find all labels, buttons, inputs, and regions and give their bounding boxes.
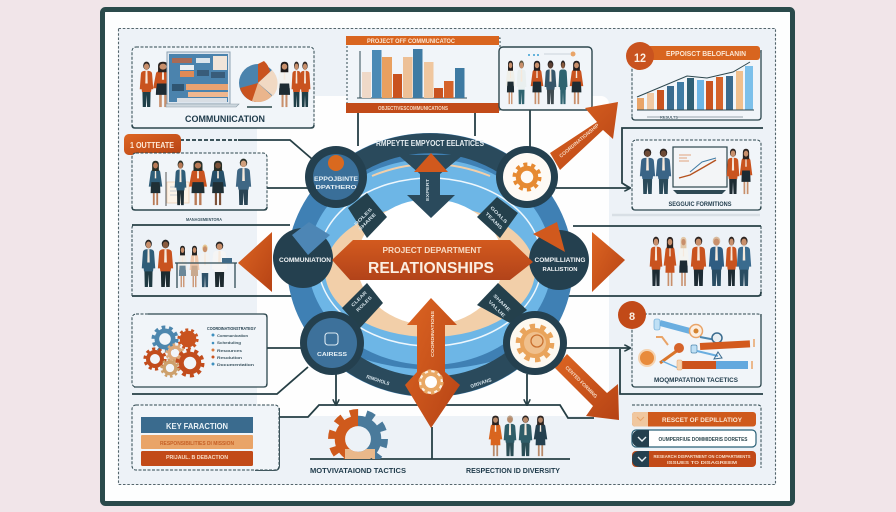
bar: lower row bbox=[141, 451, 253, 466]
panel: top team bbox=[499, 47, 592, 110]
icon: motivation gear bbox=[332, 413, 384, 465]
node: left communication: COMMUNIATION bbox=[279, 258, 331, 264]
bar chart: rising bbox=[637, 62, 754, 110]
bar chart bbox=[357, 49, 467, 98]
bar: key faraction bbox=[141, 417, 253, 433]
chart footer: OBJECTIVESCOMMUNICATIONS bbox=[378, 106, 449, 112]
arc: bottom band: GRIVANS bbox=[470, 377, 493, 390]
chart header: PROJECT OFF COMMUNICATOC bbox=[367, 39, 456, 45]
node: top-right bbox=[496, 146, 558, 208]
arc: bottom band bbox=[340, 354, 520, 390]
arrow: north-east bbox=[550, 102, 618, 170]
arc: top band bbox=[340, 139, 520, 176]
arrow: bottom centre: COORDINATIONS bbox=[430, 311, 435, 357]
row: resolve bbox=[632, 451, 756, 467]
list: gear items: Scheduling bbox=[217, 341, 242, 345]
outer frame bbox=[102, 10, 792, 504]
arrow: top centre: EXPERT bbox=[425, 179, 430, 201]
badge: 8 bbox=[618, 301, 646, 329]
icon: pie chart bbox=[239, 61, 278, 107]
arc: bottom band: RIMOHOLS bbox=[365, 374, 391, 387]
panel: meeting team bbox=[132, 153, 267, 210]
node: right compiling: RALLISTION bbox=[542, 267, 578, 273]
icon: audience bbox=[277, 62, 310, 107]
dashed inner border bbox=[118, 28, 776, 484]
panel: gears list bbox=[132, 314, 267, 387]
tab text: SHARE bbox=[492, 293, 511, 312]
arrow: right bbox=[592, 232, 625, 292]
panel: respect rows bbox=[632, 405, 761, 468]
arc: top band: RMPEYTE EMPYOCT EELATICES bbox=[376, 139, 485, 148]
icon: seven people bbox=[650, 237, 751, 286]
label: motivation tactics bottom: MOTVIVATAIOND TACTICS bbox=[310, 466, 406, 475]
tab text: CLEAR bbox=[350, 289, 369, 308]
arrow: top centre bbox=[398, 153, 463, 218]
icon: diversity group bbox=[489, 416, 547, 456]
panel: communication bbox=[132, 47, 314, 128]
arrow: north-east: COORDINATIONSHIP bbox=[558, 122, 601, 160]
tab text: SHARE bbox=[357, 212, 377, 232]
tab text: TEAMS bbox=[484, 211, 503, 230]
infographic bbox=[100, 7, 795, 506]
panel: bar chart top centre bbox=[346, 36, 500, 113]
panel: right team bbox=[650, 226, 761, 296]
chart footer bbox=[346, 103, 499, 113]
row: communicate: OUMPERFIUE DOMMIDERIS DORETES bbox=[658, 437, 748, 443]
arrow: south-east bbox=[555, 354, 619, 420]
label: communication: COMMUNIICATION bbox=[185, 114, 265, 124]
white centre area bbox=[257, 96, 609, 416]
ring diagram bbox=[273, 133, 589, 428]
list: gear items: COORDINATIONSTRATEGY bbox=[207, 326, 256, 331]
badge: 1 outteate bbox=[124, 134, 181, 155]
row: resolve: ISSUES TO DISAGREEM bbox=[667, 460, 737, 465]
icon: laptop dashboard bbox=[166, 52, 239, 107]
arrow: south-east: CENTED FORMING bbox=[564, 365, 598, 400]
icon: two men bbox=[640, 149, 671, 194]
bar: middle row: RESPONSIBILITIES DI MISSION bbox=[160, 441, 234, 447]
list: gear items: Documentation bbox=[217, 363, 255, 367]
tab text: ROLES bbox=[353, 207, 373, 227]
icon: monitor bbox=[673, 147, 727, 194]
tab text: ROLES bbox=[355, 295, 373, 313]
icon: gear cluster bbox=[145, 327, 202, 376]
badge: 8: 8 bbox=[629, 311, 635, 323]
icon: table and staff bbox=[142, 240, 237, 288]
node: top-left: EPPOJBINTE bbox=[314, 176, 359, 183]
icon: people shaking hands bbox=[149, 159, 251, 205]
arrow: bottom centre bbox=[405, 298, 460, 428]
badge: 12: 12 bbox=[634, 51, 646, 65]
node: top-left: DPATHERO bbox=[316, 185, 357, 191]
label: respection in diversity: RESPECTION ID DIVERSITY bbox=[466, 466, 560, 475]
bar: middle row bbox=[141, 435, 253, 449]
icon: gear on bottom arrow bbox=[419, 370, 443, 394]
inner tinted panel bbox=[118, 28, 776, 485]
chart header bbox=[346, 36, 499, 45]
connector lines bbox=[132, 110, 763, 470]
caption: meeting team: MANAGEMENTORA bbox=[186, 217, 223, 222]
banner: relationships bbox=[332, 240, 533, 280]
node: right compiling: COMPILLIATING bbox=[534, 258, 586, 264]
node: left communication bbox=[273, 222, 333, 288]
ring layers bbox=[287, 133, 573, 397]
node: bottom-left bbox=[300, 311, 364, 375]
node: bottom-left: CAIRESS bbox=[317, 352, 347, 358]
icon: linked tools bbox=[639, 319, 754, 370]
label: discussion: SEGGUIC FORMITIONS bbox=[668, 201, 732, 208]
tab text: VALUE bbox=[487, 299, 506, 318]
axis caption: RESULTS bbox=[660, 114, 678, 120]
node: bottom-right bbox=[503, 311, 567, 375]
icon: six people bbox=[506, 61, 583, 104]
arrow: left bbox=[238, 232, 272, 292]
row: resolve: RESEARCH DISPARTMENT ON COMPARTMENTS bbox=[654, 454, 750, 459]
panel: teamwork table bbox=[132, 225, 237, 296]
badge: 1 outteate: 1 OUTTEATE bbox=[130, 140, 174, 150]
tabs: diagonal connectors bbox=[342, 193, 527, 328]
row: respect: RESCET OF DEPILLATIOY bbox=[662, 418, 742, 424]
panel: key faraction bbox=[132, 405, 279, 470]
icon: whiteboard bbox=[166, 172, 189, 206]
node: top-left bbox=[305, 146, 367, 208]
list: gear items: Communication bbox=[217, 334, 249, 338]
tab text bbox=[350, 205, 511, 318]
banner: relationships: RELATIONSHIPS bbox=[368, 260, 494, 277]
panel: motivation tactics bbox=[618, 301, 761, 387]
list: gear items: Resources bbox=[217, 349, 242, 353]
list: gear items bbox=[207, 326, 256, 367]
icon: presenters bbox=[140, 62, 173, 107]
panel: monitor presentation bbox=[632, 140, 761, 210]
node: right compiling bbox=[529, 222, 589, 290]
banner: relationships: PROJECT DEPARTMENT bbox=[382, 246, 482, 255]
bar: lower row: PRIJAUL. B DEBACTION bbox=[166, 455, 228, 461]
bar: key faraction: KEY FARACTION bbox=[166, 421, 228, 431]
label: motivation tactics: MOQMPATATION TACETICS bbox=[654, 377, 739, 384]
panel: top-right bar chart bbox=[626, 42, 761, 120]
chart header: EPPOISCT BELOFLANIN bbox=[666, 51, 746, 58]
tab text: GOALS bbox=[489, 205, 508, 224]
panel shadow bbox=[612, 214, 760, 216]
list: gear items: Resolution bbox=[217, 356, 243, 360]
icon: two presenters bbox=[727, 149, 752, 194]
icon: dots and line bbox=[528, 52, 576, 56]
